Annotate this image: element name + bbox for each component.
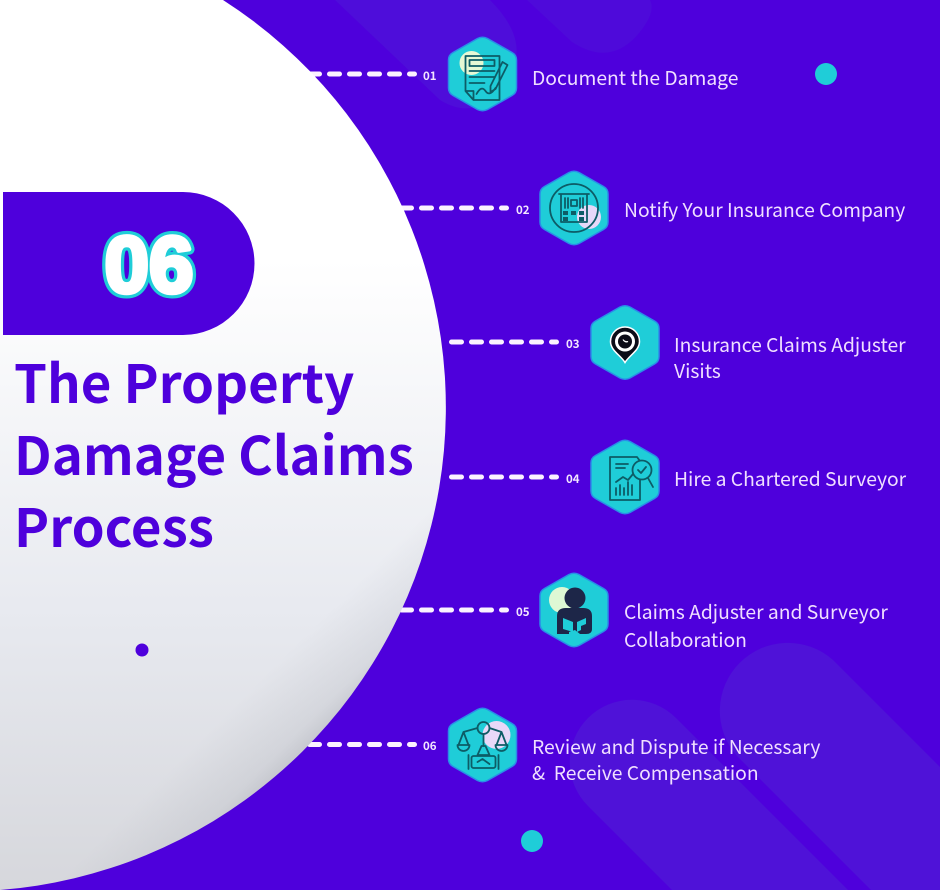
step 04 (566, 440, 907, 514)
number tab (3, 192, 254, 335)
step 06: 06 (423, 738, 437, 754)
step 01 (423, 37, 738, 111)
title: The Property (14, 343, 354, 419)
step 04: 04 (566, 471, 580, 487)
title: Process (14, 487, 214, 563)
step 05: Collaboration (624, 625, 747, 653)
background decorative stripes (335, 0, 940, 890)
big number 06: 06 (105, 220, 193, 309)
step 02: 02 (516, 202, 530, 218)
icon: report with magnifier (591, 440, 659, 514)
label: Insurance Claims Adjuster (674, 330, 906, 358)
icon: person reading (540, 573, 608, 647)
large white circle (0, 0, 446, 890)
label: Review and Dispute if Necessary (532, 732, 820, 760)
step 06 (423, 708, 820, 786)
step 05 (516, 573, 888, 653)
step 02 (516, 171, 905, 245)
title: Damage Claims (14, 415, 414, 491)
label: Notify Your Insurance Company (624, 195, 905, 223)
icon: scales and handshake (448, 708, 516, 782)
label: Claims Adjuster and Surveyor (624, 597, 888, 625)
step 05: 05 (516, 604, 530, 620)
step 03: Visits (674, 356, 721, 384)
step 03: 03 (566, 336, 580, 352)
teal dot top (815, 63, 837, 85)
small purple dot (136, 644, 148, 656)
step 03 (566, 306, 906, 384)
big number 06: 06 (105, 220, 193, 309)
step 01: 01 (423, 68, 437, 84)
step 06: & Receive Compensation (532, 758, 759, 786)
connector dashes (310, 74, 556, 744)
label: Hire a Chartered Surveyor (674, 464, 907, 492)
icon: building (540, 171, 608, 245)
label: Document the Damage (532, 63, 738, 91)
teal dot bottom (521, 830, 543, 852)
icon: document (448, 37, 516, 111)
icon: location pin (591, 306, 659, 379)
